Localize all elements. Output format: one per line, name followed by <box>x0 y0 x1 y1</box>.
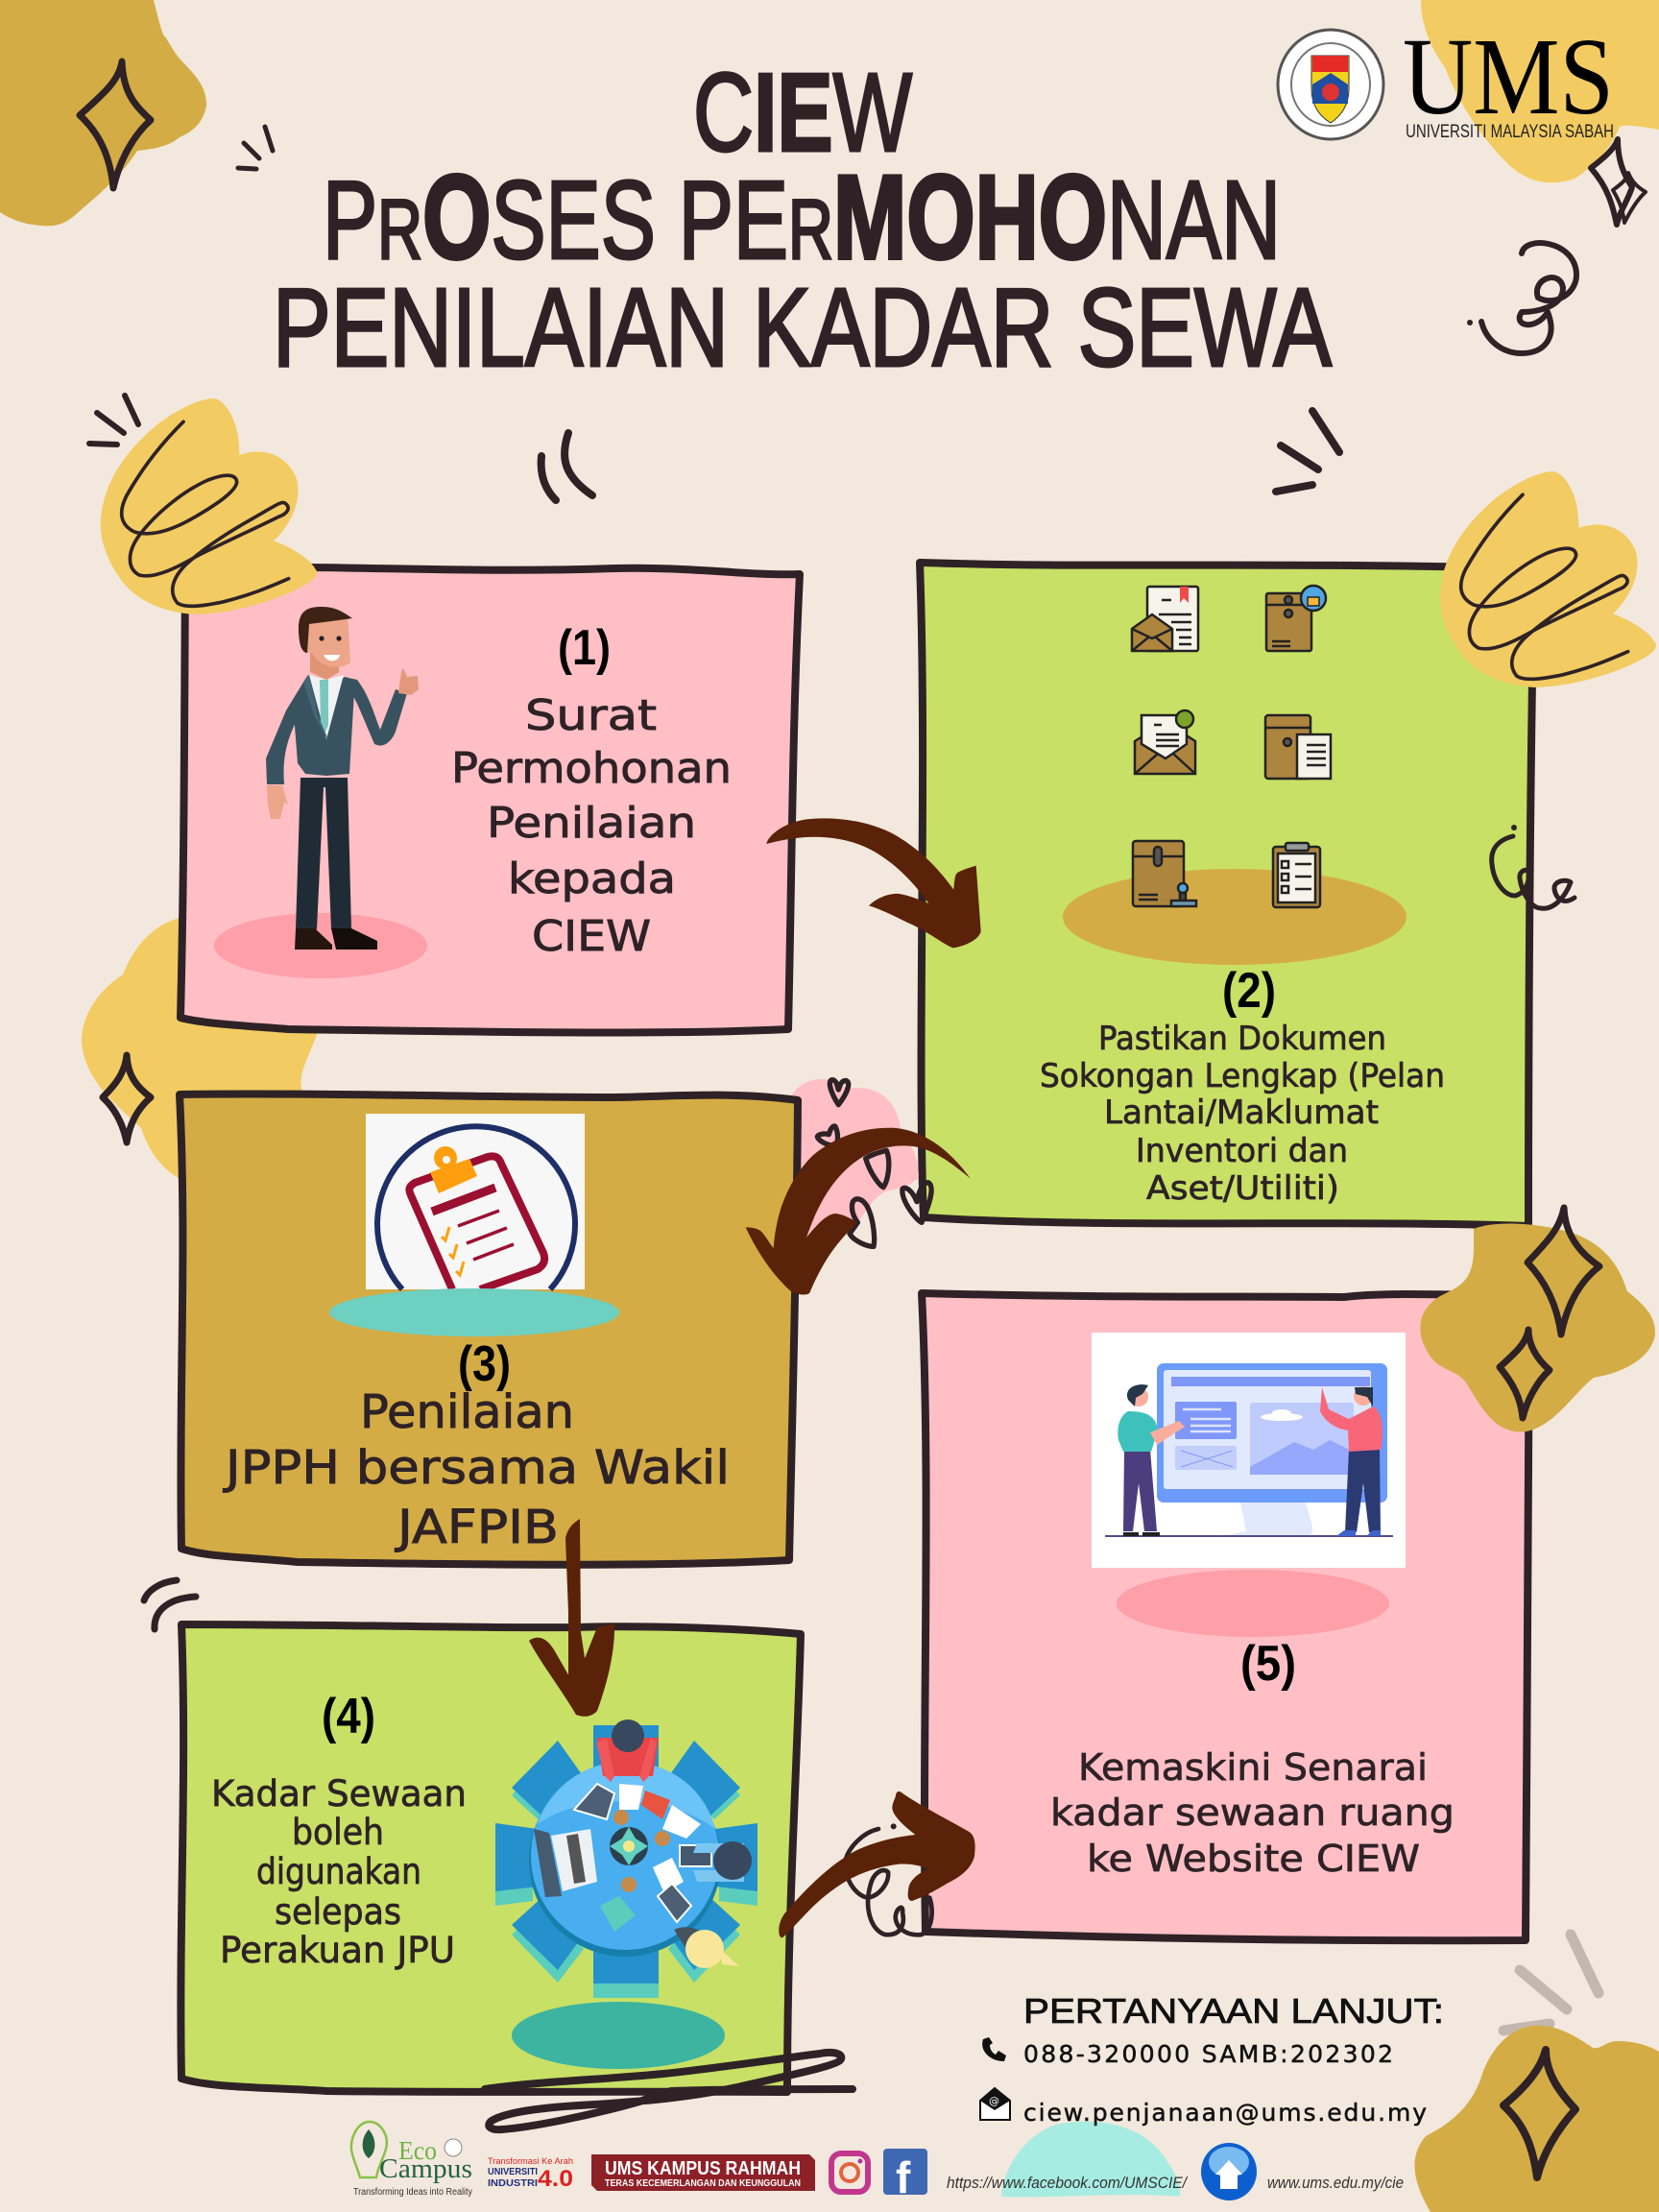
logo: Eco Campus: Campus <box>379 2154 472 2184</box>
heading: step 1 number: (1) <box>558 620 611 676</box>
title: CIEW <box>693 50 912 175</box>
icon: Instagram <box>831 2153 868 2192</box>
ellipse: step 3 base <box>329 1288 619 1336</box>
text: step 4 description: Perakuan JPU <box>220 1930 455 1971</box>
doodle: pink blob with hearts <box>790 1079 931 1246</box>
image: people building a website on a monitor <box>1092 1333 1406 1568</box>
blob: top left gold with star <box>0 0 206 226</box>
logo: UMS Kampus Rahmah banner <box>591 2154 815 2191</box>
title <box>273 50 1332 390</box>
text: step 5 description: Kemaskini Senarai <box>1078 1746 1428 1789</box>
logo: Eco Campus: Transforming Ideas into Reality <box>353 2187 472 2198</box>
flower: top right beside step 2 with scribble <box>1440 471 1656 687</box>
logo: Universiti Industri 4.0: 4.0 <box>538 2166 573 2192</box>
text: website URL: www.ums.edu.my/cie <box>1267 2174 1404 2192</box>
text: step 3 description: JPPH bersama Wakil <box>223 1441 730 1495</box>
logo: UMS Kampus Rahmah banner: TERAS KECEMERLANGAN DAN KEUNGGULAN <box>605 2178 801 2189</box>
text: step 1 description: CIEW <box>532 912 651 961</box>
text: step 4 description: Kadar Sewaan <box>211 1773 467 1815</box>
ellipse: step 1 base <box>214 913 427 978</box>
blob: top right yellow <box>1421 0 1659 182</box>
heading: further enquiries: PERTANYAAN LANJUT: <box>1023 1991 1444 2031</box>
text: step 5 description: ke Website CIEW <box>1087 1838 1420 1880</box>
doodles: grey marks bottom right <box>1503 1935 1599 2031</box>
blob: gold beside step 5 with stars <box>1420 1208 1655 1431</box>
arrow: step 2 to step 3 <box>746 1128 971 1295</box>
ellipse: step 2 base <box>1063 869 1407 965</box>
footer logos <box>351 2122 1404 2202</box>
text: step 3 description: JAFPIB <box>395 1501 559 1554</box>
image: clipboard illustration <box>366 1114 585 1289</box>
text: step 3 description <box>223 1385 730 1554</box>
arrow: step 4 to step 5 <box>779 1791 975 1937</box>
text: step 2 description: Aset/Utiliti) <box>1146 1169 1339 1208</box>
flower: top left with scribble <box>101 398 317 614</box>
logo: UMS crest and wordmark <box>1278 15 1614 142</box>
text: step 1 description: Permohonan <box>451 744 732 793</box>
logo: Eco Campus: Eco <box>398 2136 437 2165</box>
text: step 1 description: kepada <box>508 854 676 903</box>
text: step 1 description: Penilaian <box>487 799 696 848</box>
blob: teal footer shape <box>1001 2122 1180 2197</box>
panel: step 2 <box>920 563 1534 1226</box>
ellipse: step 5 base <box>1117 1570 1389 1637</box>
icon: Facebook: f <box>896 2152 911 2202</box>
doodle: loops near step 5 arrow <box>845 1823 932 1935</box>
text: step 5 description: kadar sewaan ruang <box>1050 1791 1455 1834</box>
text: phone number: 088-320000 SAMB:202302 <box>1023 2040 1393 2068</box>
panel: step 4 <box>180 1624 801 2092</box>
text: step 1 description <box>451 691 732 961</box>
icon: envelope with stamp <box>1133 841 1196 906</box>
text: step 4 description <box>211 1773 467 1971</box>
arrow: step 1 to step 2 <box>766 818 981 948</box>
panel: step 5 <box>922 1293 1529 1940</box>
contact block <box>980 1991 1444 2127</box>
doodles: top area marks <box>89 127 1646 500</box>
icon: home button <box>1201 2143 1257 2200</box>
text: step 4 description: boleh <box>292 1812 384 1853</box>
heading: step 3 number: (3) <box>458 1336 511 1392</box>
icon: phone <box>982 2037 1006 2061</box>
logo: Universiti Industri 4.0 <box>488 2156 573 2192</box>
icon: envelope and document <box>1265 715 1331 779</box>
logo: UMS crest and wordmark: UMS <box>1403 15 1614 137</box>
text: step 2 description: Sokongan Lengkap (Pelan <box>1040 1057 1445 1095</box>
arrow: step 3 to step 4 <box>529 1519 614 1717</box>
icon: clipboard checklist <box>1273 843 1320 907</box>
text: step 4 description: digunakan <box>256 1851 421 1892</box>
logo: Universiti Industri 4.0: INDUSTRI <box>488 2178 538 2189</box>
text: step 3 description: Penilaian <box>360 1385 574 1439</box>
title: PROSES PERMOHONAN <box>323 152 1281 284</box>
blob: left middle yellow with star <box>82 917 318 1187</box>
doodle: right scribble beside step 2 <box>1492 825 1575 908</box>
logo: Universiti Industri 4.0: UNIVERSITI <box>488 2167 538 2177</box>
heading: step 5 number: (5) <box>1240 1636 1296 1692</box>
icon: email envelope <box>980 2088 1010 2120</box>
illustration: meeting around a round table <box>495 1719 757 1998</box>
text: step 4 description: selepas <box>275 1891 401 1933</box>
icon: email envelope: @ <box>989 2095 999 2107</box>
heading: step 2 number: (2) <box>1222 963 1276 1019</box>
text: step 2 description: Lantai/Maklumat <box>1104 1094 1379 1132</box>
icon: envelope with document <box>1132 587 1198 651</box>
doodle: panel 4 marks and underline scribble <box>144 1580 853 2129</box>
icon: sealed envelope with lock <box>1266 586 1326 651</box>
logo: Universiti Industri 4.0: Transformasi Ke Arah <box>488 2156 573 2166</box>
text: step 5 description <box>1050 1746 1455 1880</box>
logo: UMS Kampus Rahmah banner: UMS KAMPUS RAHMAH <box>605 2158 801 2179</box>
icon: open envelope with approved letter <box>1135 710 1195 774</box>
text: step 2 description <box>1040 1020 1445 1208</box>
panel: step 3 <box>180 1094 798 1565</box>
heading: step 4 number: (4) <box>322 1689 375 1744</box>
title: PENILAIAN KADAR SEWA <box>273 265 1332 390</box>
text: step 2 description: Pastikan Dokumen <box>1098 1020 1386 1058</box>
panel: step 1 <box>180 566 800 1032</box>
text: step 1 description: Surat <box>525 691 657 740</box>
text: Facebook URL: https://www.facebook.com/UMSCIE/ <box>947 2174 1189 2192</box>
text: email address: ciew.penjanaan@ums.edu.my <box>1023 2099 1427 2127</box>
logo: Eco Campus <box>351 2122 472 2198</box>
ellipse: step 4 base <box>512 2002 725 2069</box>
text: step 2 description: Inventori dan <box>1136 1132 1348 1170</box>
blob: bottom right gold with star <box>1415 2026 1659 2212</box>
illustration: businessman thumbs up <box>266 607 419 950</box>
icon: Facebook <box>883 2149 927 2202</box>
